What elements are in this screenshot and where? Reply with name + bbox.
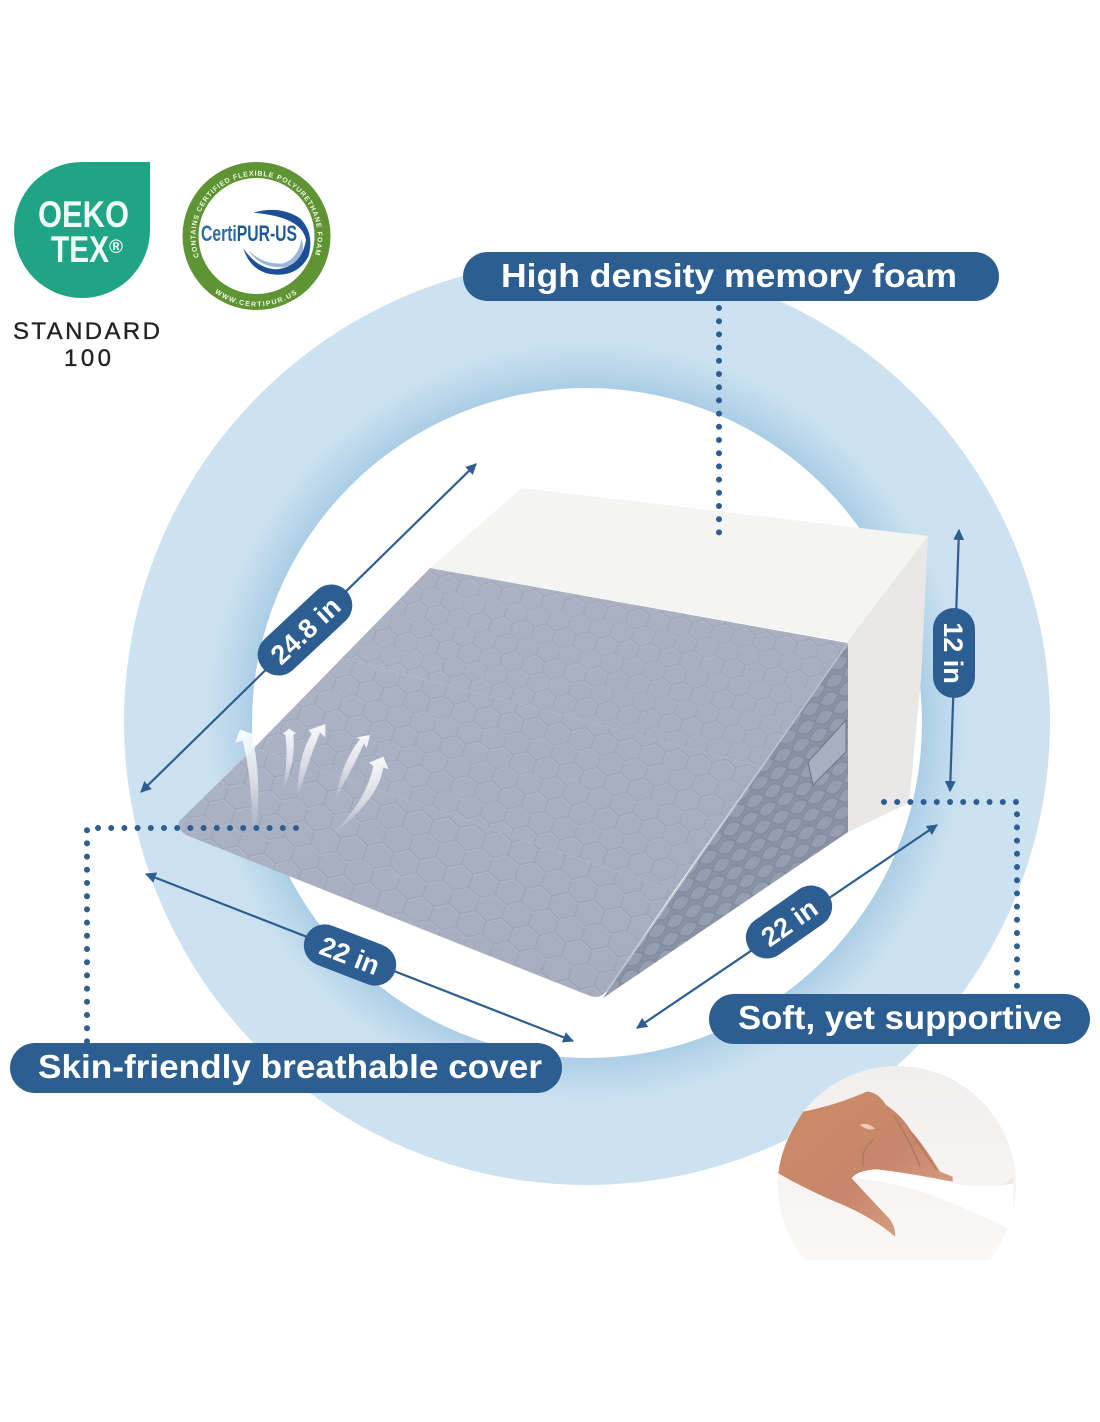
callout leader: breathable cover <box>87 828 296 1042</box>
callout: Skin-friendly breathable cover <box>10 1043 562 1093</box>
logo: OEKO-TEX Standard 100 <box>13 162 160 372</box>
photo: hand pressing memory foam <box>778 1066 1016 1260</box>
callout: High density memory foam <box>463 252 999 301</box>
arrow: 24.8 in dimension line <box>141 464 476 792</box>
dimension badge: 12 in: 12 in <box>938 622 968 684</box>
dimension badge: 22 in front <box>298 918 402 992</box>
dimension badge: 22 in front: 22 in <box>316 931 384 981</box>
callout: Soft, yet supportive: Soft, yet supportive <box>738 999 1062 1036</box>
logo: OEKO-TEX Standard 100: 100 <box>64 345 111 372</box>
icon: breathable air arrows <box>235 724 389 835</box>
dimension badge: 22 in side: 22 in <box>756 893 823 953</box>
arrow: 22 in side dimension line <box>637 825 937 1028</box>
logo: OEKO-TEX Standard 100: OEKO <box>38 194 129 235</box>
logo: OEKO-TEX Standard 100: ® <box>109 237 123 258</box>
side handle <box>808 720 846 785</box>
cover front face <box>170 568 848 1000</box>
foam top face <box>430 488 928 642</box>
callout leader: soft yet supportive <box>884 802 1017 992</box>
dimension badge: 22 in side <box>738 877 840 967</box>
foam side face <box>848 536 928 832</box>
callout: Soft, yet supportive <box>709 994 1090 1044</box>
logo: CertiPUR-US seal <box>182 162 330 310</box>
logo: CertiPUR-US seal: WWW.CERTIPUR.US <box>216 288 296 307</box>
dimension badge: 24.8 in: 24.8 in <box>265 591 347 670</box>
logo: OEKO-TEX Standard 100: STANDARD <box>13 318 160 345</box>
callout leader: memory foam <box>716 308 722 535</box>
dimension badge: 12 in <box>933 608 975 698</box>
logo: OEKO-TEX Standard 100: TEX <box>51 229 109 270</box>
illustration: foam wedge pillow <box>170 488 928 1000</box>
logo: CertiPUR-US seal: CONTAINS CERTIFIED FLEXIBLE POLYURETHANE FOAM <box>190 170 322 258</box>
arrow: 22 in front dimension line <box>146 874 573 1041</box>
cover side panel <box>603 643 848 998</box>
logo: CertiPUR-US seal: CertiPUR-US <box>201 221 297 246</box>
callout: Skin-friendly breathable cover: Skin-friendly breathable cover <box>38 1048 542 1085</box>
arrow: 12 in dimension line <box>950 530 959 791</box>
callout: High density memory foam: High density memory foam <box>501 257 957 294</box>
dimension badge: 24.8 in <box>249 576 361 684</box>
panel: blue ring background <box>124 259 1050 1185</box>
cover seam <box>606 643 848 992</box>
